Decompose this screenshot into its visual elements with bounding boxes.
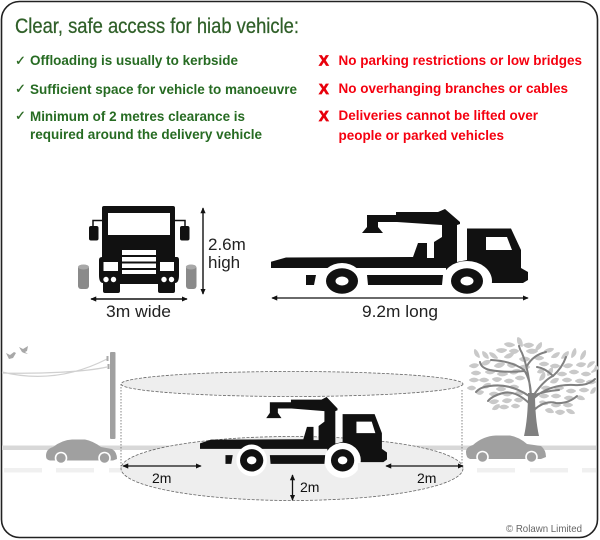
icon: hiab truck in clearance zone [200, 397, 388, 478]
icon: tree [468, 338, 597, 436]
icon: car right [466, 436, 546, 463]
restrictions list: X [319, 82, 329, 98]
restrictions list [319, 53, 582, 143]
arrow: rear clearance [123, 465, 201, 467]
arrow: truck height [202, 208, 204, 294]
requirements list: Offloading is usually to kerbside [30, 53, 238, 68]
icon: car left [46, 440, 117, 464]
arrow: truck length [272, 297, 528, 299]
requirements list: ✓ [15, 82, 26, 97]
arrow: truck width [91, 298, 187, 300]
restrictions list: Deliveries cannot be lifted over [338, 108, 539, 123]
label: front clearance: 2m [417, 470, 436, 486]
label: height [208, 235, 246, 272]
restrictions list: X [319, 54, 329, 70]
label: height: high [208, 253, 240, 272]
icon: truck front view [89, 206, 190, 293]
birds [6, 346, 28, 359]
clearance zone: ground ellipse [121, 436, 463, 500]
restrictions list: X [319, 109, 329, 125]
requirements list: ✓ [15, 109, 26, 124]
clearance zone: top ellipse [121, 372, 463, 396]
requirements list: required around the delivery vehicle [30, 127, 262, 142]
arrow: front clearance [386, 465, 463, 467]
arrow: side clearance [292, 475, 294, 500]
label: side clearance: 2m [300, 479, 319, 495]
restrictions list: people or parked vehicles [338, 128, 504, 143]
label: length: 9.2m long [362, 302, 438, 321]
requirements list [15, 53, 297, 142]
clearance zone: sides [121, 384, 462, 468]
label: rear clearance: 2m [152, 470, 171, 486]
label: height: 2.6m [208, 235, 246, 254]
road [2, 446, 596, 472]
telegraph pole and wires [2, 352, 116, 439]
label: width: 3m wide [106, 302, 171, 321]
icon: hiab truck side view [271, 209, 530, 301]
copyright: © Rolawn Limited [506, 523, 582, 535]
title: Clear, safe access for hiab vehicle: [15, 15, 299, 38]
icon: bollards [78, 264, 196, 289]
restrictions list: No parking restrictions or low bridges [338, 53, 582, 68]
requirements list: ✓ [15, 54, 26, 69]
requirements list: Minimum of 2 metres clearance is [30, 109, 245, 124]
restrictions list: No overhanging branches or cables [338, 81, 568, 96]
requirements list: Sufficient space for vehicle to manoeuvre [30, 82, 297, 97]
